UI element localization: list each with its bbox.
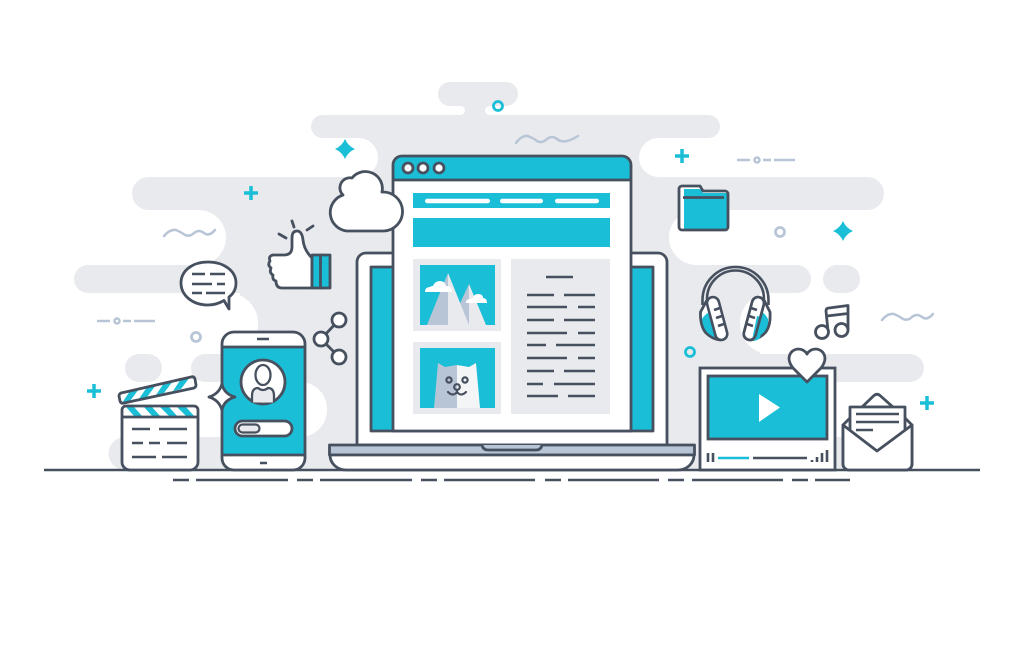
browser title bar — [393, 156, 631, 180]
clapper lid — [119, 377, 196, 403]
icon: music note — [816, 306, 848, 338]
phone — [222, 332, 305, 470]
nav bar — [413, 193, 610, 208]
icon: heart — [789, 349, 825, 382]
icon: share nodes — [314, 313, 346, 364]
article text panel — [511, 259, 610, 414]
icon: teal sparkles — [335, 139, 853, 241]
icon: white sparkle — [209, 384, 235, 410]
icon: dash-dot lines — [97, 158, 795, 324]
icon: headphones — [700, 267, 770, 341]
banner — [413, 218, 610, 247]
icon: open envelope with letter — [843, 394, 912, 470]
browser window — [393, 156, 631, 431]
icon: rings — [192, 102, 784, 356]
photo card: mountains — [413, 259, 501, 331]
slider — [235, 421, 292, 436]
icon: teal plus marks — [87, 149, 934, 410]
icon: squiggles — [164, 136, 933, 320]
icon: speech bubble — [181, 262, 236, 309]
icon: folder — [679, 186, 728, 230]
icon: clapperboard — [119, 377, 198, 470]
left ear cup — [700, 296, 729, 341]
play button — [759, 394, 780, 422]
photo card: cat — [413, 342, 501, 414]
icon: cloud — [330, 172, 403, 231]
background: cloud bands — [60, 82, 955, 470]
profile avatar — [241, 360, 285, 404]
icon: thumbs up — [269, 221, 330, 288]
player controls — [708, 450, 827, 462]
decorative accents: teal and blue-grey marks — [87, 102, 934, 410]
window buttons — [403, 163, 444, 173]
laptop — [330, 253, 694, 470]
ground line — [44, 470, 980, 480]
right ear cup — [742, 296, 770, 341]
video player — [700, 368, 835, 470]
